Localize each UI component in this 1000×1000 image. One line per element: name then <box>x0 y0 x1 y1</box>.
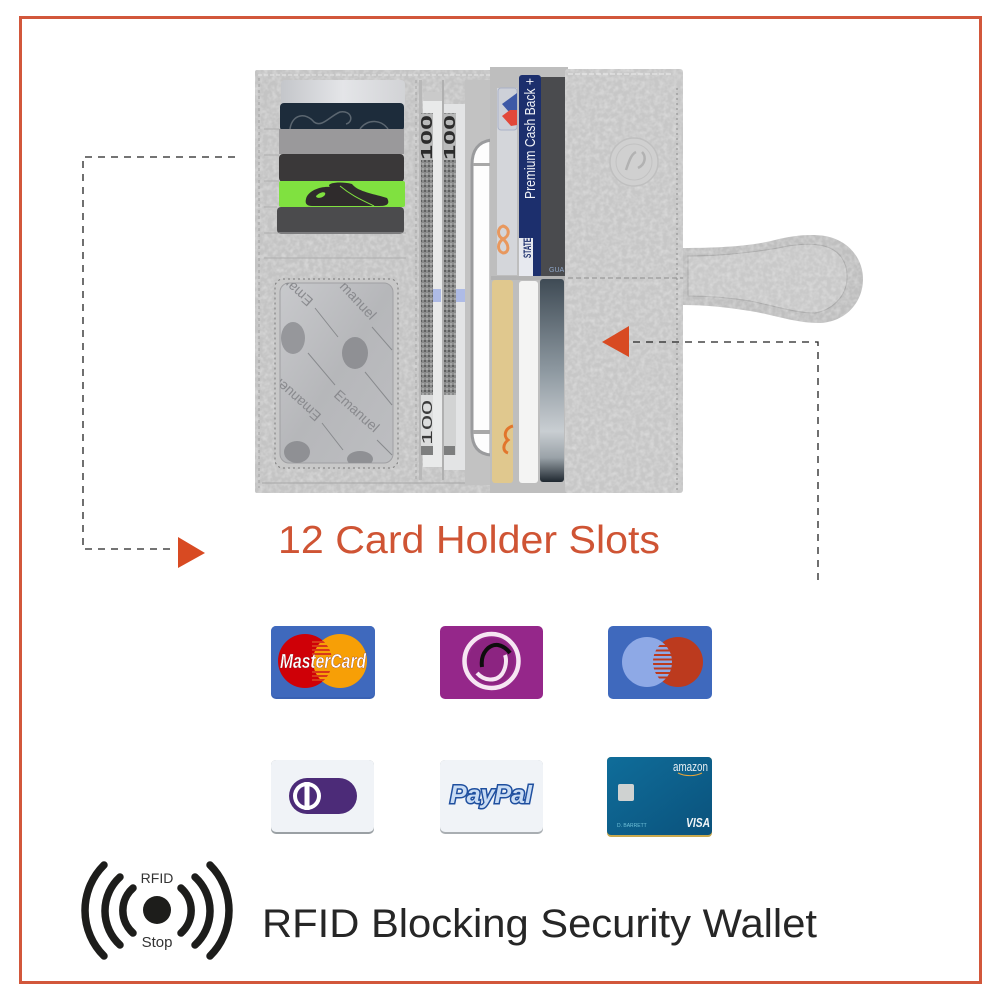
ID window: Emanuel <box>264 261 316 310</box>
icon: PayPal <box>440 760 543 834</box>
right dashed connector <box>630 342 818 580</box>
wallet strap <box>683 235 863 323</box>
money bills: 100 <box>419 400 436 445</box>
icon: Amazon Visa card: VISA <box>686 815 710 830</box>
heading: 12 card holder slots: 12 Card Holder Slots <box>278 519 660 562</box>
ID window: manuel <box>337 278 380 323</box>
icon: Maestro-style card <box>608 626 712 699</box>
icon: PayPal: PayPal <box>450 781 533 809</box>
RFID stop icon: RFID <box>141 870 173 886</box>
money bills: 100 <box>419 115 436 160</box>
ID window: Emanuel <box>272 376 324 425</box>
wallet photo <box>255 67 863 493</box>
RFID stop icon: Stop <box>142 934 172 951</box>
icon: MasterCard: MasterCard <box>280 651 367 673</box>
center card sleeves <box>490 67 568 493</box>
wallet open left body <box>255 70 495 493</box>
money bills <box>419 80 465 480</box>
icon: Diners card <box>271 760 374 834</box>
left arrowhead <box>178 537 205 568</box>
icon: Amazon Visa card: amazon <box>673 759 708 774</box>
ID window: Emanuel <box>331 386 383 435</box>
money bills: 100 <box>442 115 459 160</box>
center card sleeves: Premium Cash Back + <box>522 78 539 199</box>
phone <box>465 80 491 485</box>
embossed emblem <box>610 138 658 186</box>
left card stack <box>264 80 406 258</box>
caption: RFID blocking security wallet: RFID Blocking Security Wallet <box>262 902 817 946</box>
RFID stop icon <box>85 865 229 956</box>
front flap <box>565 69 683 493</box>
center card sleeves: STATE <box>522 238 534 258</box>
right arrowhead <box>602 326 629 357</box>
ID window <box>274 278 398 468</box>
bill 1 <box>423 101 442 467</box>
icon: MasterCard <box>271 626 375 699</box>
icon: Amazon Visa card <box>607 757 712 837</box>
left dashed connector <box>83 157 235 549</box>
center card sleeves: GUA <box>549 267 564 274</box>
payment icons <box>271 626 712 837</box>
bill 2 <box>444 104 465 470</box>
icon: purple card <box>440 626 543 699</box>
icon: Amazon Visa card: D. BARRETT <box>617 823 647 829</box>
